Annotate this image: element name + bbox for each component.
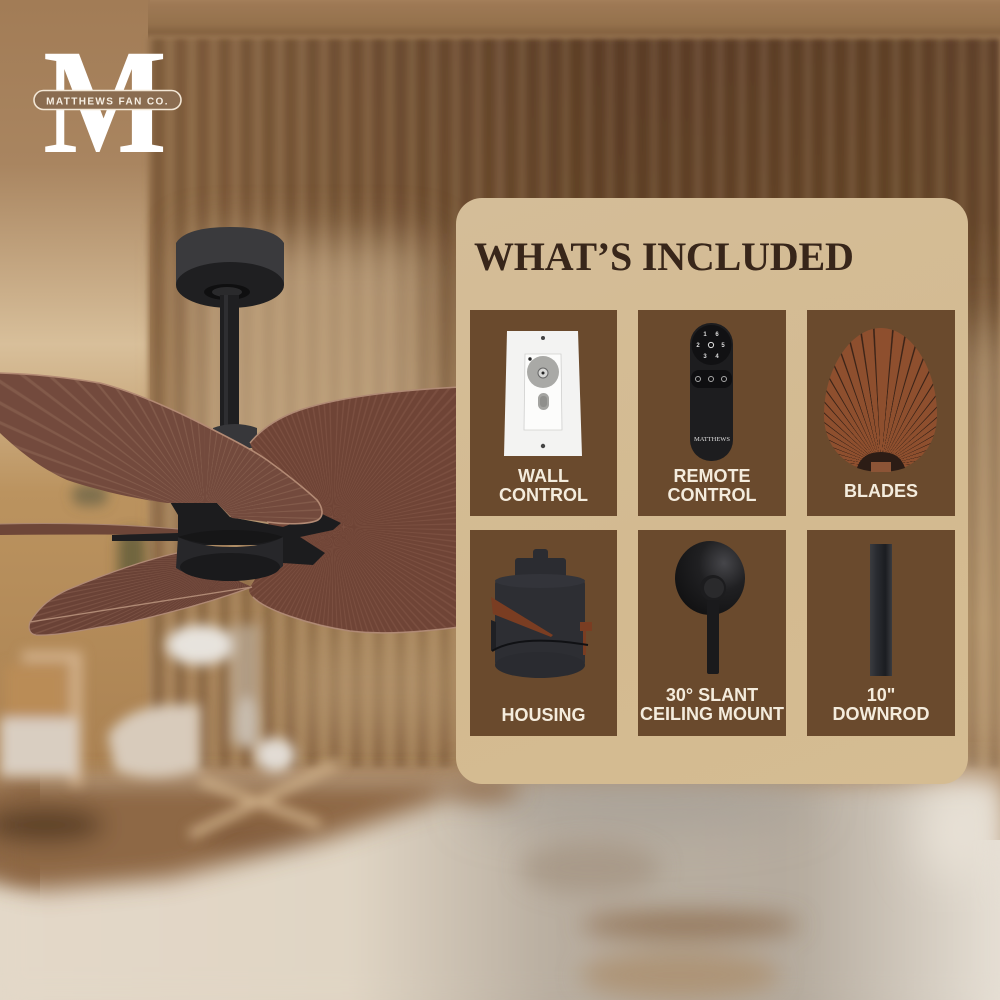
lower and right blade rims <box>28 386 456 636</box>
left wall <box>0 0 150 820</box>
label: CONTROL <box>499 485 588 505</box>
icon: blade <box>824 328 937 468</box>
label: DOWNROD <box>832 704 930 724</box>
icon: remote control <box>690 323 733 461</box>
label: HOUSING <box>501 705 586 725</box>
card: remote control <box>638 310 786 516</box>
logo name pill: MATTHEWS FAN CO. <box>46 96 169 108</box>
ceiling fan: right blade <box>249 388 456 632</box>
label: CEILING MOUNT <box>640 704 784 724</box>
rug edge <box>0 785 40 880</box>
icon: downrod <box>870 544 892 676</box>
icon: slant ceiling mount <box>675 541 745 674</box>
icon: remote control: 1 <box>703 332 707 338</box>
label: REMOTE <box>673 466 750 486</box>
icon: remote control: 2 <box>696 343 700 349</box>
label <box>668 466 756 505</box>
label: 30° SLANT <box>666 685 758 705</box>
icon: blade base <box>857 452 905 472</box>
icon: remote control: 5 <box>721 343 725 349</box>
icon: remote control: 4 <box>715 354 719 360</box>
label <box>640 685 784 724</box>
title: WHAT’S INCLUDED <box>474 234 854 279</box>
label: BLADES <box>844 481 918 501</box>
icon: wall control <box>504 331 582 456</box>
panel: what's included <box>456 198 968 784</box>
label: WALL <box>518 466 569 486</box>
card: blades <box>807 310 955 516</box>
label: CONTROL <box>668 485 756 505</box>
ceiling fan: lower left blade <box>30 554 250 634</box>
ceiling fan: canopy and downrod <box>128 227 284 528</box>
icon: remote control: 6 <box>715 332 719 338</box>
icon: remote control: 3 <box>703 354 707 360</box>
label <box>499 466 588 505</box>
ceiling band <box>148 0 1000 36</box>
card: ceiling mount <box>638 530 786 736</box>
wall light patches <box>190 240 1000 760</box>
logo name pill <box>34 90 181 110</box>
icon: remote control: MATTHEWS <box>694 436 730 443</box>
label: 10" <box>867 685 895 705</box>
ceiling fan: upper left blade <box>0 374 322 523</box>
blurred furniture <box>0 484 340 835</box>
card: housing <box>470 530 617 736</box>
card: wall control <box>470 310 617 516</box>
ceiling fan: far left blade <box>0 227 284 535</box>
upper left blade rim <box>0 372 323 524</box>
ceiling fan: motor housing <box>112 503 341 581</box>
card: downrod <box>807 530 955 736</box>
logo: Matthews Fan Co. <box>33 40 182 160</box>
icon: housing <box>491 549 592 678</box>
wall <box>148 38 1000 768</box>
label <box>832 685 930 724</box>
floor <box>0 840 1000 1000</box>
